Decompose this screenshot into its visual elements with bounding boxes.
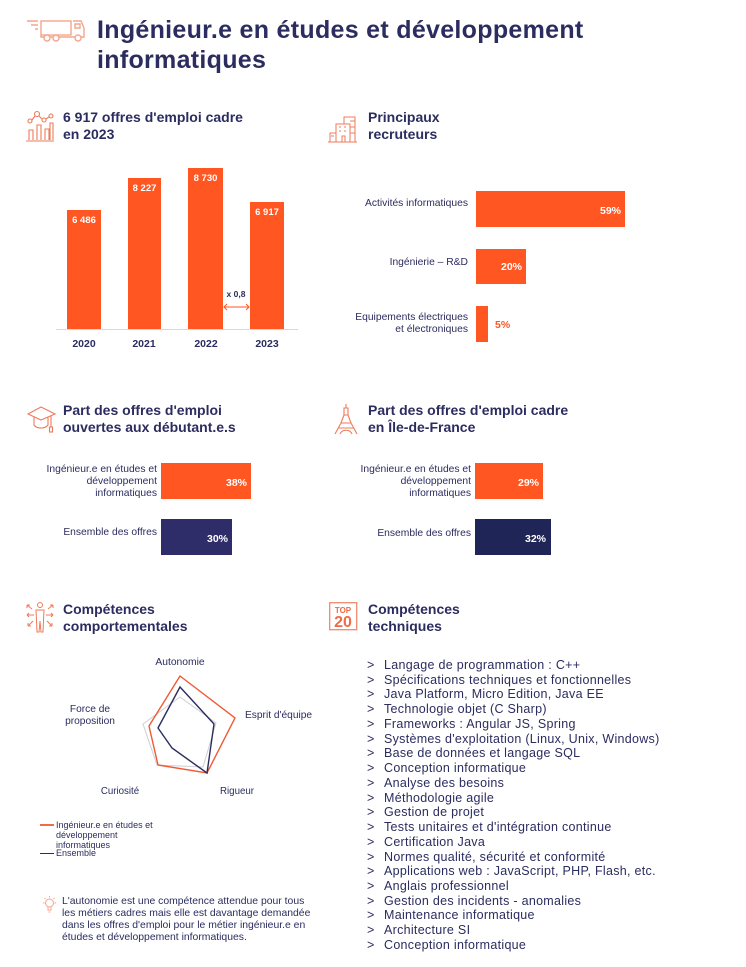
heading: offres d'emploi: 6 917 offres d'emploi cadre — [63, 109, 243, 125]
bar chart: débutants — [46, 463, 251, 555]
heading: débutants: Part des offres d'emploi — [63, 402, 222, 418]
skill — [367, 894, 727, 908]
icon: top 20 — [329, 602, 358, 631]
skill: > — [367, 746, 375, 760]
skill: Applications web : JavaScript, PHP, Flash, etc. — [384, 864, 656, 878]
heading: recruteurs: recruteurs — [368, 126, 437, 142]
skill: > — [367, 673, 375, 687]
callout text: dans les offres d'emploi pour le métier ingénieur.e en — [62, 920, 305, 931]
bar 5% — [476, 306, 488, 342]
bar 2021 — [128, 178, 161, 329]
skill: > — [367, 923, 375, 937]
bar orange — [475, 463, 543, 499]
skill: > — [367, 687, 375, 701]
skill: > — [367, 894, 375, 908]
skill: Certification Java — [384, 835, 485, 849]
skill — [367, 850, 727, 864]
axis label: Force de — [70, 704, 110, 715]
icon: graduation cap — [27, 406, 56, 433]
heading: recruteurs: Principaux — [368, 109, 440, 125]
bar navy — [475, 519, 551, 555]
skill: > — [367, 776, 375, 790]
legend text — [56, 820, 153, 850]
label: Activités informatiques — [365, 198, 468, 209]
baseline — [56, 329, 298, 330]
bar chart: Île-de-France — [360, 463, 551, 555]
value 5%: 5% — [495, 319, 510, 331]
skill: > — [367, 761, 375, 775]
series: Ingénieur.e — [149, 676, 235, 773]
label: Equipements électriques — [355, 312, 468, 323]
callout text: les métiers cadres mais elle est davantage demandée — [62, 908, 310, 919]
legend — [40, 820, 153, 858]
label — [360, 464, 471, 499]
series: Ensemble — [158, 687, 214, 773]
label: Ingénierie – R&D — [390, 257, 468, 268]
growth label: x 0,8 — [227, 289, 245, 299]
skill: Tests unitaires et d'intégration continue — [384, 820, 612, 834]
skill: Gestion des incidents - anomalies — [384, 894, 581, 908]
label — [355, 312, 468, 335]
skill: > — [367, 938, 375, 952]
skill: > — [367, 850, 375, 864]
label: développement — [87, 476, 157, 487]
skill: Technologie objet (C Sharp) — [384, 702, 547, 716]
icon: buildings — [328, 116, 357, 142]
heading: Île-de-France — [368, 402, 568, 435]
skill — [367, 908, 727, 923]
label: et électroniques — [395, 324, 468, 335]
heading: compétences techniques: techniques — [368, 618, 442, 634]
skill: > — [367, 835, 375, 849]
label: Ensemble des offres — [63, 527, 157, 538]
icon: chart — [26, 111, 54, 142]
skill — [367, 879, 727, 894]
heading: recruteurs — [368, 109, 440, 142]
heading: offres d'emploi — [63, 109, 243, 142]
label: informatiques — [95, 488, 157, 499]
heading: compétences comportementales — [63, 601, 187, 634]
arrow: growth — [223, 304, 250, 310]
skill: > — [367, 820, 375, 834]
value 20%: 20% — [501, 261, 522, 273]
bar 2020 — [67, 210, 101, 329]
bar navy — [161, 519, 232, 555]
skill: Spécifications techniques et fonctionnelles — [384, 673, 631, 687]
callout text — [62, 896, 310, 943]
title: informatiques — [97, 46, 266, 74]
bar 59% — [476, 191, 625, 227]
label: développement — [401, 476, 471, 487]
list: compétences techniques — [367, 658, 660, 952]
skill — [367, 938, 727, 953]
axis label: Rigueur — [220, 786, 255, 797]
heading: débutants — [63, 402, 236, 435]
title: Ingénieur.e en études et développement — [97, 16, 584, 44]
skill: Anglais professionnel — [384, 879, 509, 893]
heading: Île-de-France: en Île-de-France — [368, 419, 475, 435]
value 2020: 6 486 — [72, 215, 96, 226]
skill: > — [367, 864, 375, 878]
icon: light bulb — [43, 896, 56, 912]
legend text: Ingénieur.e en études et — [56, 820, 153, 830]
skill: Analyse des besoins — [384, 776, 504, 790]
legend text: informatiques — [56, 840, 110, 850]
skill: Frameworks : Angular JS, Spring — [384, 717, 576, 731]
skill — [367, 835, 727, 850]
skill: > — [367, 702, 375, 716]
bar chart: offres par année — [56, 168, 298, 350]
value 59%: 59% — [600, 205, 621, 217]
skill: Architecture SI — [384, 923, 470, 937]
skill: > — [367, 658, 375, 672]
year 2021: 2021 — [132, 338, 156, 350]
heading: compétences comportementales: comportementales — [63, 618, 187, 634]
value 30%: 30% — [207, 533, 228, 545]
legend swatch navy — [40, 853, 54, 854]
year 2022: 2022 — [194, 338, 218, 350]
label: Ingénieur.e en études et — [46, 464, 157, 475]
skill: Gestion de projet — [384, 805, 484, 819]
bar 2023 — [250, 202, 284, 329]
skill: > — [367, 732, 375, 746]
skill: > — [367, 908, 375, 922]
heading: débutants: ouvertes aux débutant.e.s — [63, 419, 236, 435]
bar 2022 — [188, 168, 223, 329]
year 2023: 2023 — [255, 338, 279, 350]
icon: person with arrows — [26, 602, 54, 632]
heading: compétences techniques: Compétences — [368, 601, 460, 617]
axis label: proposition — [65, 716, 115, 727]
bar chart: recruteurs — [355, 191, 625, 342]
skill: Conception informatique — [384, 761, 526, 775]
title — [97, 16, 584, 74]
label: informatiques — [409, 488, 471, 499]
skill: Méthodologie agile — [384, 791, 494, 805]
value 32%: 32% — [525, 533, 546, 545]
skill: Normes qualité, sécurité et conformité — [384, 850, 606, 864]
label: Ensemble des offres — [377, 528, 471, 539]
axis label: Curiosité — [101, 786, 139, 797]
callout text: études et développement informatiques. — [62, 932, 247, 943]
axis label: Esprit d'équipe — [245, 710, 312, 721]
skill: > — [367, 717, 375, 731]
skill: Conception informatique — [384, 938, 526, 952]
year 2020: 2020 — [72, 338, 96, 350]
label: Ingénieur.e en études et — [360, 464, 471, 475]
value 38%: 38% — [226, 477, 247, 489]
axis label: Autonomie — [155, 657, 205, 668]
bar orange — [161, 463, 251, 499]
heading: compétences techniques — [368, 601, 460, 634]
skill — [367, 923, 727, 938]
icon: truck — [27, 20, 85, 42]
radar chart — [65, 657, 312, 797]
value 2022: 8 730 — [194, 173, 217, 184]
legend swatch orange — [40, 824, 54, 826]
heading: offres d'emploi: en 2023 — [63, 126, 114, 142]
skill: Systèmes d'exploitation (Linux, Unix, Windows) — [384, 732, 660, 746]
skill: Java Platform, Micro Edition, Java EE — [384, 687, 604, 701]
skill: > — [367, 791, 375, 805]
legend text: développement — [56, 830, 118, 840]
icon: top 20: 20 — [334, 614, 352, 631]
skill: > — [367, 879, 375, 893]
skill: Base de données et langage SQL — [384, 746, 580, 760]
value 2021: 8 227 — [133, 183, 156, 194]
icon: top 20: TOP — [335, 606, 352, 615]
heading: compétences comportementales: Compétences — [63, 601, 155, 617]
heading: Île-de-France: Part des offres d'emploi cadre — [368, 402, 568, 418]
icon: Eiffel tower — [334, 404, 358, 434]
skill: > — [367, 805, 375, 819]
label — [46, 464, 157, 499]
value 2023: 6 917 — [255, 207, 279, 218]
value 29%: 29% — [518, 477, 539, 489]
skill: Langage de programmation : C++ — [384, 658, 580, 672]
series: référence grise — [143, 697, 216, 767]
callout text: L'autonomie est une compétence attendue pour tous — [62, 896, 304, 907]
bar 20% — [476, 249, 526, 284]
legend text: Ensemble — [56, 848, 96, 858]
skill: Maintenance informatique — [384, 908, 535, 922]
